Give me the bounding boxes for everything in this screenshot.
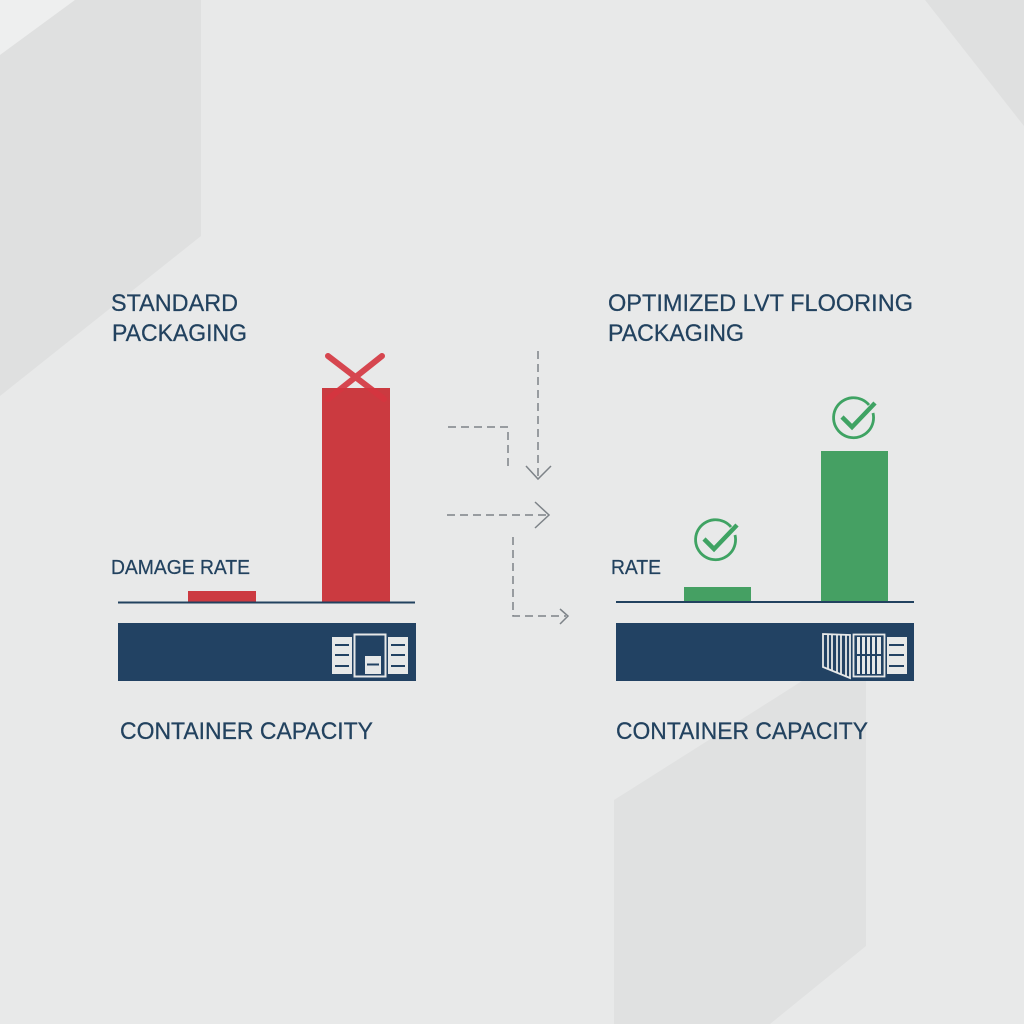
icon: check small [696, 520, 737, 560]
baseline [616, 601, 914, 603]
arrow: rightward [447, 502, 549, 528]
icon: red cross [328, 356, 384, 399]
heading: optimized packaging: OPTIMIZED LVT FLOORING [608, 290, 913, 317]
label: damage rate: DAMAGE RATE [111, 557, 250, 579]
arrow: elbow connector lower [513, 537, 568, 624]
container capacity bar [118, 623, 416, 681]
arrow: downward [526, 351, 551, 479]
panel: optimized packaging [608, 290, 914, 745]
icon: open container [823, 634, 907, 678]
heading: optimized packaging: PACKAGING [608, 320, 744, 347]
icon: check large [834, 398, 875, 438]
bar: optimized capacity [821, 451, 888, 602]
heading: standard packaging: STANDARD [111, 290, 238, 317]
heading: standard packaging: PACKAGING [112, 320, 247, 347]
bar: damage rate [188, 591, 256, 602]
icon: container with boxes [332, 634, 408, 676]
baseline [118, 602, 415, 604]
label: container capacity: CONTAINER CAPACITY [120, 718, 373, 745]
label: rate: RATE [611, 557, 661, 579]
bar: rate [684, 587, 751, 602]
container capacity bar [616, 623, 914, 681]
panel: standard packaging [111, 290, 416, 745]
bar: standard capacity [322, 388, 390, 602]
label: container capacity: CONTAINER CAPACITY [616, 718, 868, 745]
arrows: dashed flow connectors [447, 351, 568, 624]
arrow: elbow connector upper [448, 427, 508, 468]
